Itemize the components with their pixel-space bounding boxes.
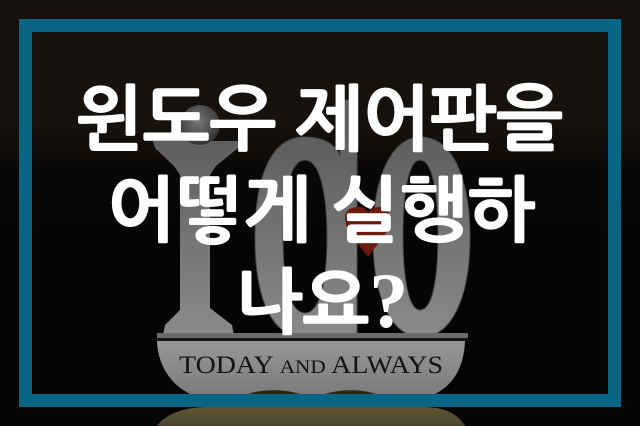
base cut-outs bbox=[248, 390, 376, 394]
base bowl bbox=[157, 341, 465, 394]
base top bbox=[157, 333, 468, 339]
base engraving: TODAY AND ALWAYS bbox=[179, 352, 443, 379]
candle below base bbox=[157, 407, 465, 426]
title bbox=[76, 81, 563, 344]
pearl bbox=[180, 105, 220, 145]
letter o bbox=[373, 137, 470, 337]
title line 3: 나요? bbox=[236, 257, 408, 344]
figurine: I do bbox=[153, 100, 470, 426]
title line 1: 윈도우 제어판을 bbox=[76, 81, 563, 160]
letter d bbox=[255, 100, 357, 337]
heart bbox=[345, 207, 390, 257]
letter I bbox=[153, 141, 240, 335]
title line 2: 어떻게 실행하 bbox=[107, 172, 535, 251]
